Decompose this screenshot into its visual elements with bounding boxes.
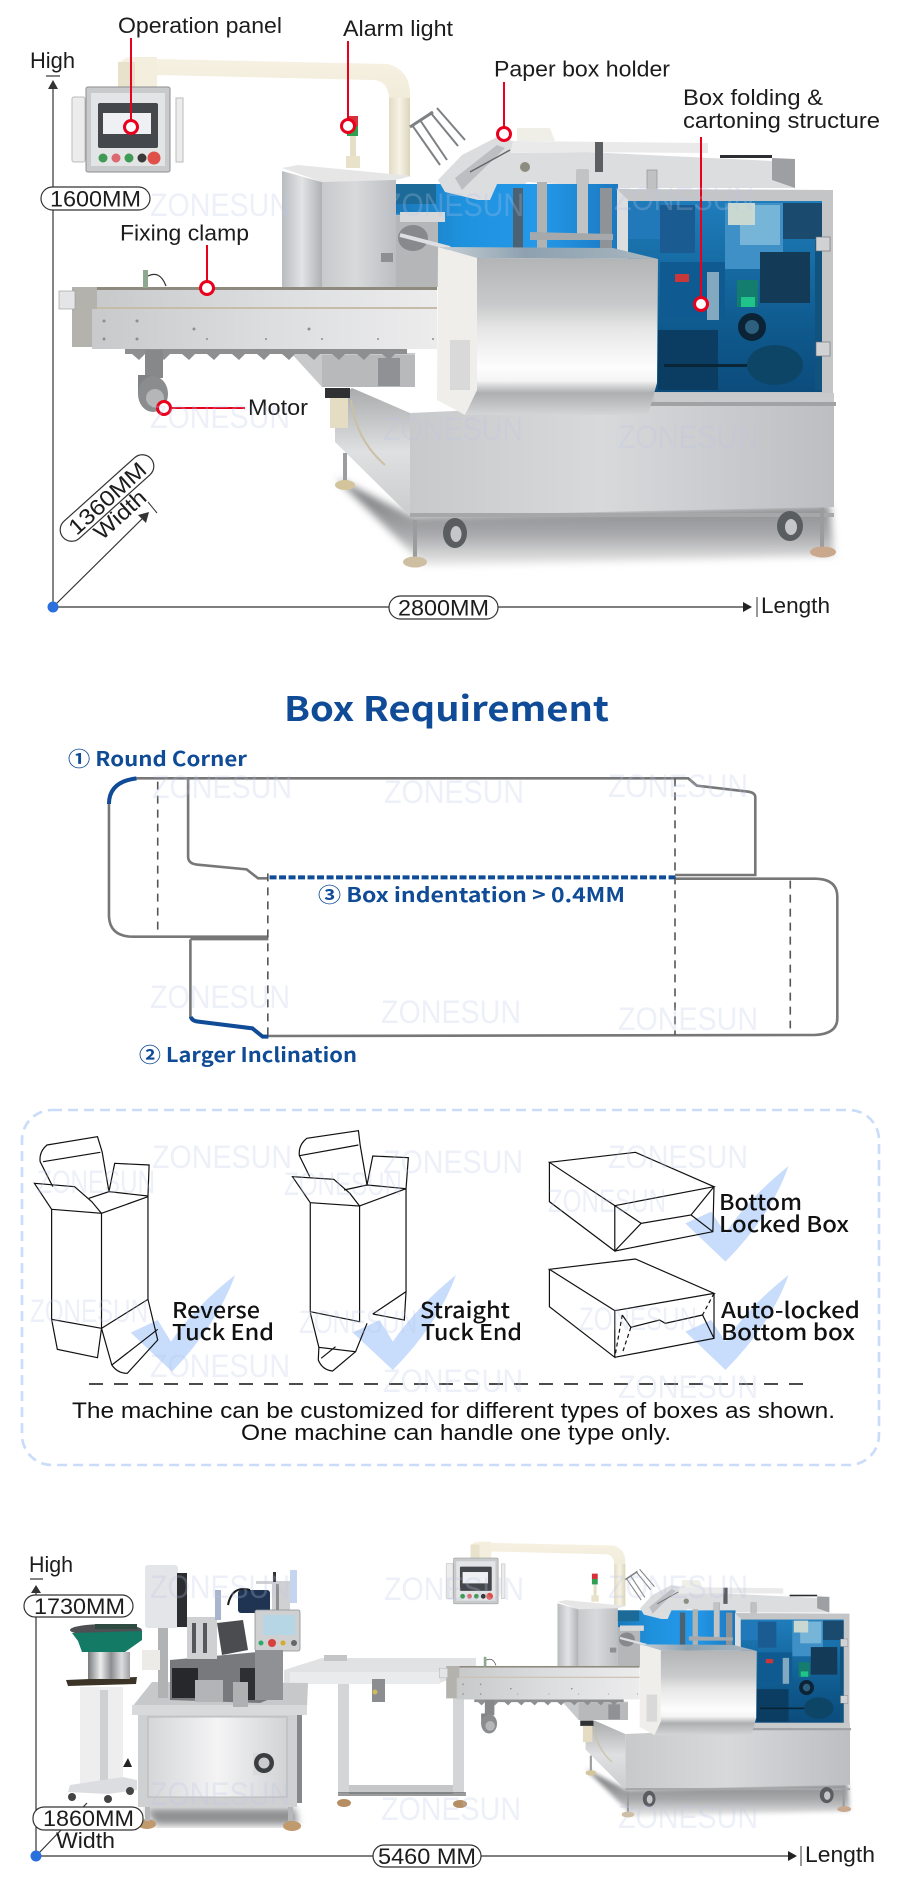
panel: production line dimension diagram: [24, 1542, 875, 1869]
axes: height, length and width: [46, 76, 757, 617]
panel: box types: [22, 1110, 879, 1465]
watermarks: ZONESUN: [30, 1293, 148, 1329]
label: High: High: [29, 1552, 73, 1577]
callout: Fixing clamp: Fixing clamp: [120, 220, 249, 246]
watermarks: [30, 181, 758, 1835]
label: Larger Inclination: ② Larger Inclination: [139, 1039, 357, 1068]
watermarks: ZONESUN: [614, 181, 754, 217]
dimension: 1860MM width: 1860MM: [43, 1806, 134, 1831]
label: Straight Tuck End: [420, 1293, 522, 1347]
watermarks: ZONESUN: [618, 1001, 758, 1037]
illustration: cartoning machine: [59, 57, 836, 568]
heading: Box Requirement: Box Requirement: [284, 682, 609, 731]
dimension: 1360MM width: [55, 450, 160, 547]
box: bottom locked: [549, 1152, 714, 1251]
watermarks: ZONESUN: [383, 1144, 523, 1180]
watermarks: ZONESUN: [384, 187, 524, 223]
watermarks: ZONESUN: [579, 1301, 697, 1337]
watermarks: ZONESUN: [150, 1776, 290, 1812]
watermarks: ZONESUN: [548, 1183, 666, 1219]
watermarks: ZONESUN: [608, 1139, 748, 1175]
watermarks: ZONESUN: [383, 411, 523, 447]
label: Length: Length: [805, 1842, 875, 1867]
watermarks: ZONESUN: [150, 187, 290, 223]
watermarks: ZONESUN: [618, 1369, 758, 1405]
callout: Paper box holder: [494, 56, 670, 140]
note: machine customization: The machine can be customized for different types of boxes as shown.: [72, 1398, 835, 1423]
illustration: connecting conveyor: [284, 1655, 476, 1808]
box: straight tuck end: [292, 1131, 408, 1371]
dimension: 5460 MM length: 5460 MM: [378, 1844, 476, 1869]
watermarks: ZONESUN: [381, 994, 521, 1030]
watermarks: ZONESUN: [384, 1571, 524, 1607]
label: Bottom Locked Box: Bottom: [719, 1185, 802, 1217]
label: Reverse Tuck End: Reverse: [172, 1293, 260, 1325]
highlight: round corner, inclination and indentation: [109, 778, 675, 1037]
watermarks: ZONESUN: [608, 1569, 748, 1605]
label: Length: Length: [761, 593, 830, 618]
note: machine customization: One machine can handle one type only.: [241, 1420, 671, 1445]
watermarks: ZONESUN: [381, 1791, 521, 1827]
label: Auto-locked Bottom box: Auto-locked: [721, 1293, 860, 1325]
watermarks: ZONESUN: [608, 768, 748, 804]
label: Reverse Tuck End: Tuck End: [172, 1315, 274, 1347]
label: Straight Tuck End: Tuck End: [421, 1315, 522, 1347]
callout: Motor: Motor: [248, 395, 308, 420]
illustration: filling machine: [66, 1565, 308, 1831]
label: Bottom Locked Box: [719, 1185, 849, 1239]
label: Auto-locked Bottom box: Bottom box: [721, 1315, 855, 1347]
watermarks: ZONESUN: [618, 419, 758, 455]
watermarks: ZONESUN: [284, 1166, 402, 1202]
watermarks: ZONESUN: [150, 979, 290, 1015]
label: Round Corner: ① Round Corner: [68, 743, 247, 772]
watermarks: ZONESUN: [150, 1348, 290, 1384]
watermarks: ZONESUN: [150, 399, 290, 435]
box: auto-locked bottom: [549, 1259, 714, 1357]
dimension: 1360MM width: 1360MM: [63, 457, 151, 540]
box: reverse tuck end: [34, 1137, 158, 1373]
diagram: box die line: [109, 778, 837, 1037]
callout: Alarm light: Alarm light: [343, 16, 453, 41]
callout: Alarm light: [342, 16, 453, 132]
callout: Box folding and cartoning structure: Box folding &: [683, 85, 823, 110]
watermarks: ZONESUN: [152, 769, 292, 805]
watermarks: ZONESUN: [384, 774, 524, 810]
watermarks: ZONESUN: [37, 1164, 155, 1200]
callout: Motor: [158, 395, 308, 420]
callout: Operation panel: [118, 13, 282, 134]
label: Reverse Tuck End: [172, 1293, 274, 1347]
dashed frame: [22, 1110, 879, 1465]
watermarks: ZONESUN: [383, 1363, 523, 1399]
label: Straight Tuck End: Straight: [420, 1293, 510, 1325]
watermarks: ZONESUN: [150, 1569, 290, 1605]
callout: Box folding and cartoning structure: [683, 85, 880, 310]
callout: Box folding and cartoning structure: cartoning structure: [683, 108, 880, 133]
label: Auto-locked Bottom box: [721, 1293, 860, 1347]
check marks: [131, 1166, 789, 1372]
panel: machine dimension diagram: [30, 13, 880, 620]
label: Bottom Locked Box: Locked Box: [719, 1207, 849, 1239]
label: High: High: [30, 48, 75, 73]
callout: Operation panel: Operation panel: [118, 13, 282, 38]
axes: height, length and width: [30, 1579, 801, 1866]
dimension: 2800MM length: 2800MM: [398, 596, 489, 620]
callout: Paper box holder: Paper box holder: [494, 56, 670, 82]
label: Box indentation: ③ Box indentation > 0.4MM: [318, 879, 625, 908]
watermarks: ZONESUN: [618, 1799, 758, 1835]
dimension: 1730MM height: 1730MM: [34, 1594, 125, 1619]
label: Width: Width: [56, 1828, 115, 1853]
label: Width: Width: [89, 485, 151, 545]
callout: Fixing clamp: [120, 220, 249, 294]
watermarks: ZONESUN: [152, 1139, 292, 1175]
panel: box blank diagram: [68, 743, 837, 1068]
watermarks: ZONESUN: [299, 1304, 417, 1340]
note: machine customization: [72, 1398, 835, 1445]
dimension: 1600MM height: 1600MM: [50, 186, 141, 212]
illustration: cartoning machine in line: [439, 1542, 851, 1817]
